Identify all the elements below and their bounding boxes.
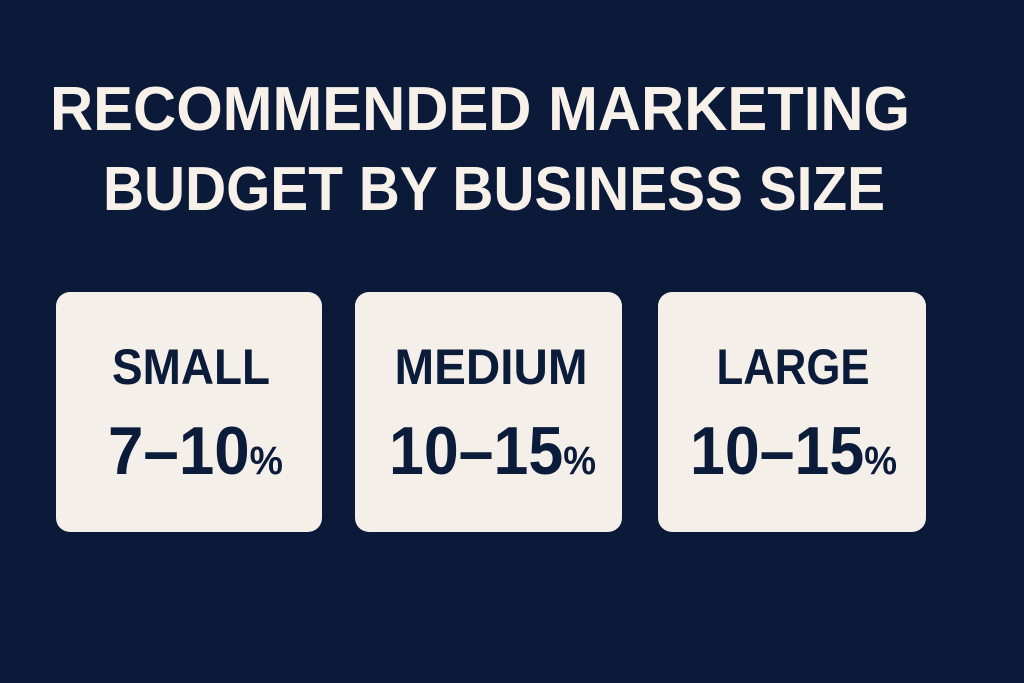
title: RECOMMENDED MARKETING [50, 75, 910, 144]
title [50, 75, 910, 224]
label: large: LARGE [716, 339, 870, 395]
title: BUDGET BY BUSINESS SIZE [103, 155, 885, 224]
card: medium [355, 292, 622, 532]
label: small: SMALL [112, 339, 270, 395]
value: small: 7–10% [108, 413, 283, 489]
card: small [56, 292, 322, 532]
label: medium: MEDIUM [394, 339, 588, 395]
value: medium: 10–15% [389, 413, 596, 489]
value: large: 10–15% [690, 413, 897, 489]
card: large [658, 292, 926, 532]
